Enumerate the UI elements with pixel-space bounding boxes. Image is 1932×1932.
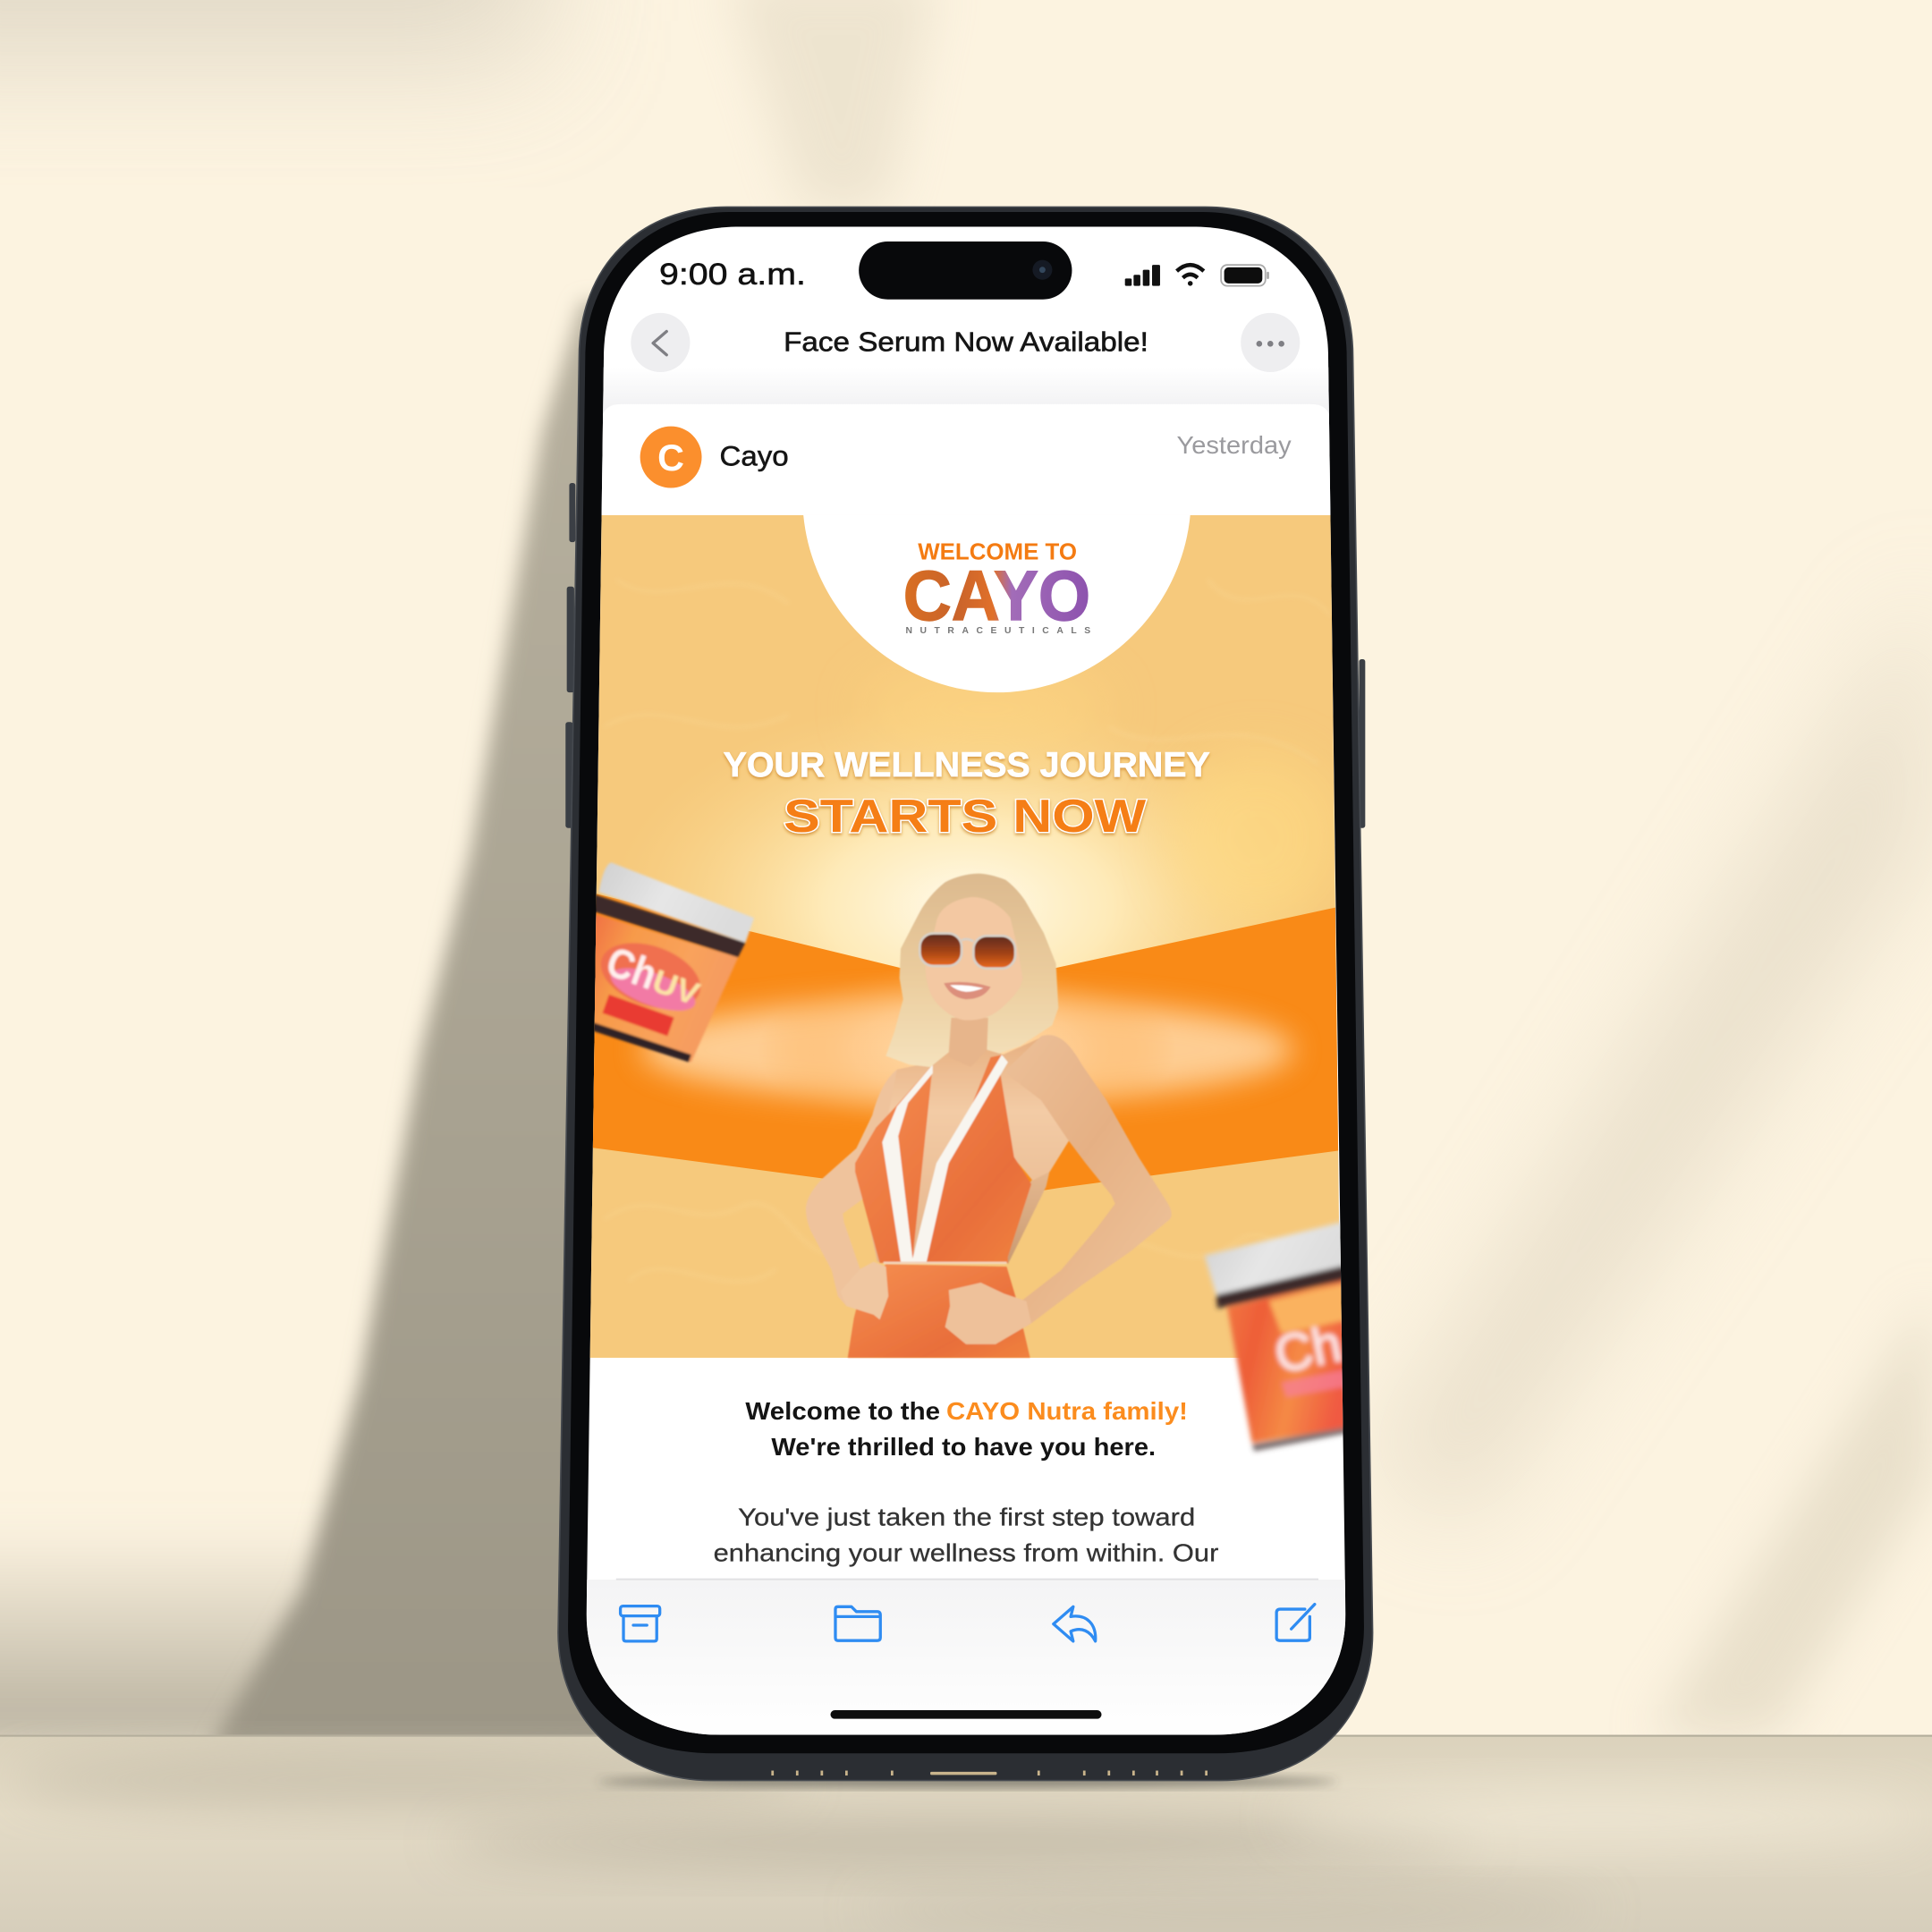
right product jar — [1205, 1218, 1355, 1452]
icon: folder — [835, 1606, 880, 1640]
body copy: enhancing your wellness from within. Our — [714, 1538, 1218, 1566]
arm right — [945, 1035, 1172, 1344]
hand right — [945, 1283, 1031, 1344]
welcome message: We're thrilled to have you here. — [771, 1433, 1156, 1461]
phone frame — [558, 207, 1373, 1781]
cayo logo: CAYO — [903, 556, 1090, 635]
icon: reply — [1054, 1606, 1096, 1641]
jar label: UV — [648, 962, 704, 1013]
sender name: Cayo — [719, 440, 789, 472]
sender row — [640, 427, 1292, 488]
back button — [631, 313, 690, 372]
back skin strip — [998, 1171, 1050, 1264]
smile — [944, 982, 991, 999]
wifi icon — [1177, 265, 1204, 284]
more button — [1241, 313, 1300, 372]
suit lower — [848, 1264, 1030, 1358]
nutraceuticals: NUTRACEUTICALS — [906, 626, 1090, 636]
welcome to: WELCOME TO — [918, 539, 1077, 564]
suit upper — [855, 1055, 1031, 1263]
screen — [579, 222, 1355, 1740]
speaker dots — [771, 1771, 1208, 1775]
email card — [601, 404, 1331, 515]
jar label: Ch — [601, 938, 663, 998]
water caustics — [604, 579, 1337, 1282]
hand left — [840, 1262, 888, 1319]
battery icon — [1221, 265, 1269, 286]
hero banner — [579, 515, 1355, 1365]
black bezel — [568, 212, 1364, 1753]
white v straps — [882, 1055, 1008, 1262]
toolbar — [579, 1579, 1355, 1737]
jar label: Ch — [1270, 1315, 1346, 1384]
floor — [0, 1735, 1932, 1932]
woman in swimsuit — [806, 874, 1172, 1358]
jar label — [601, 938, 707, 1014]
welcome message: Welcome to the — [745, 1397, 940, 1425]
icon: compose — [1276, 1605, 1315, 1640]
avatar — [640, 427, 702, 488]
body copy: You've just taken the first step toward — [738, 1503, 1195, 1530]
torso skin — [856, 1011, 1084, 1262]
avatar: C — [657, 437, 684, 479]
navigation bar — [631, 313, 1300, 372]
date: Yesterday — [1177, 431, 1292, 459]
neck — [949, 1011, 993, 1067]
logo cutout — [803, 515, 1191, 692]
dynamic island — [859, 242, 1072, 300]
welcome message — [745, 1397, 1188, 1461]
headline: STARTS NOW — [784, 791, 1147, 843]
face — [926, 897, 1022, 1021]
sunglasses — [919, 933, 1015, 969]
nav bar fade — [579, 368, 1355, 417]
orange band — [592, 894, 1338, 1191]
side buttons — [565, 483, 1365, 828]
time: 9:00 a.m. — [659, 258, 806, 292]
icon: archive — [621, 1606, 660, 1641]
arm left — [806, 1070, 897, 1319]
hair — [886, 874, 1058, 1067]
headline: YOUR WELLNESS JOURNEY — [724, 746, 1210, 784]
headline — [723, 751, 1211, 837]
signal icon — [1125, 265, 1160, 286]
cast shadow of phone — [209, 302, 616, 1750]
subject title: Face Serum Now Available! — [784, 328, 1148, 358]
home indicator — [830, 1710, 1102, 1719]
body copy — [714, 1503, 1218, 1566]
left product jar — [579, 862, 754, 1062]
welcome message: CAYO Nutra family! — [946, 1397, 1188, 1425]
status bar — [659, 242, 1269, 300]
phone — [558, 207, 1373, 1781]
